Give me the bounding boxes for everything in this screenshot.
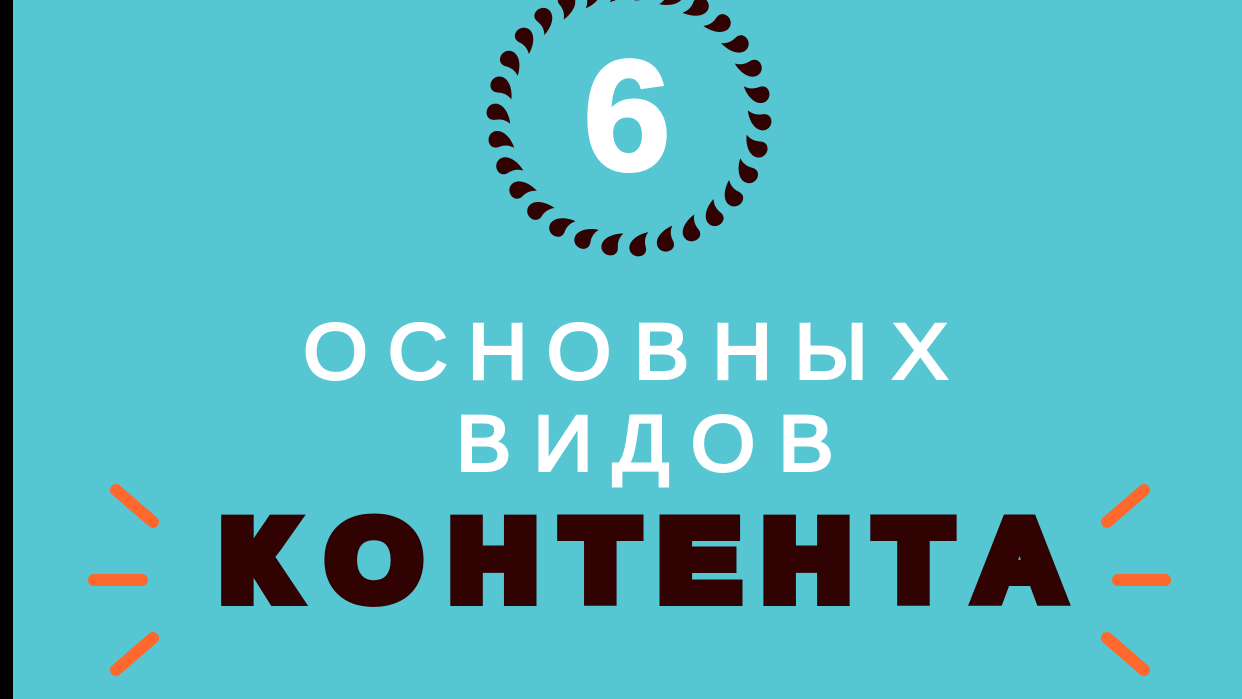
rays: right burst: [1107, 490, 1165, 670]
rays: left burst: [94, 490, 153, 670]
heading line: ВИДОВ: ВИДОВ: [456, 400, 834, 488]
left black edge bar: [0, 0, 13, 699]
heading line: ОСНОВНЫХ: ОСНОВНЫХ: [303, 308, 948, 396]
numeral 6: 6: [583, 28, 671, 204]
heading line: КОНТЕНТА: КОНТЕНТА: [221, 497, 1063, 623]
icon: ring of teardrops: [486, 0, 772, 257]
